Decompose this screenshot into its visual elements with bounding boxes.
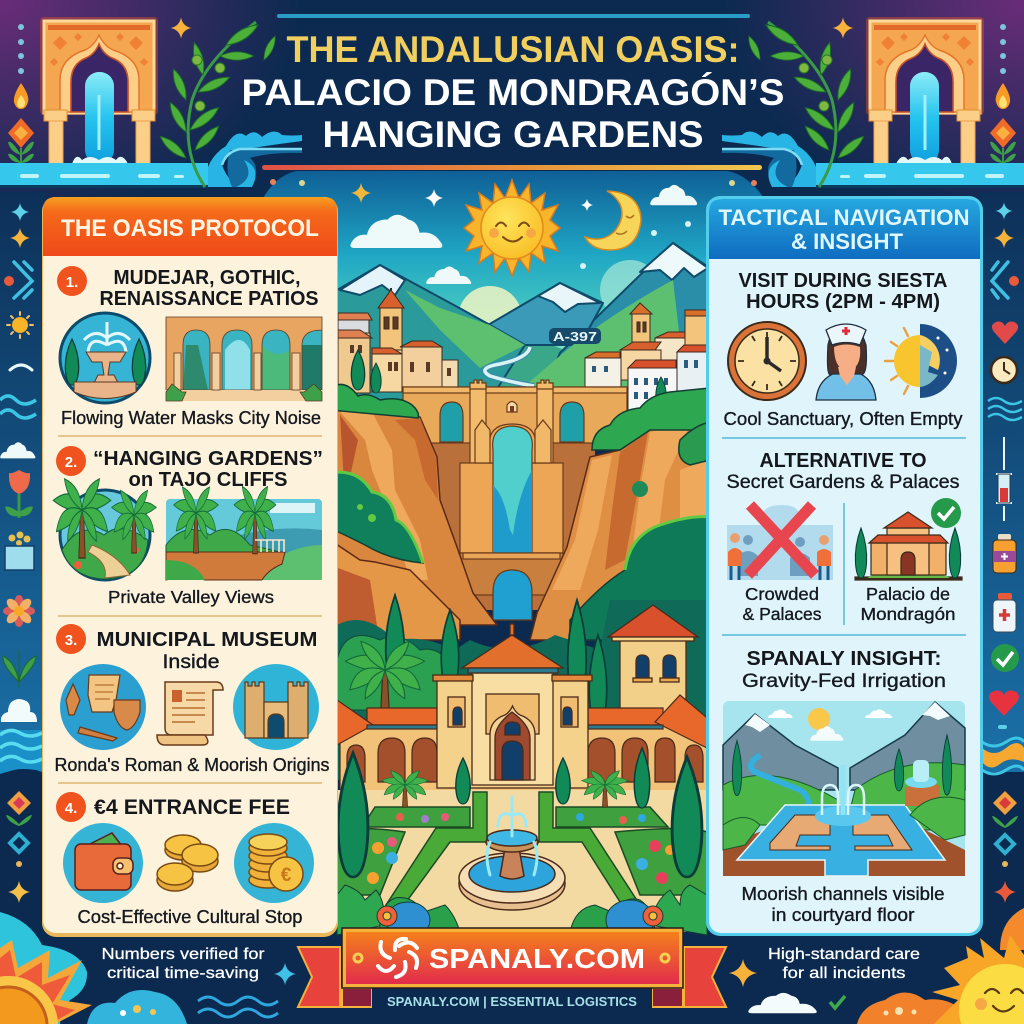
banner: spanaly.com	[298, 928, 726, 1024]
icon: coin stack: €	[281, 865, 292, 886]
caption insight	[742, 884, 944, 925]
step 1 heading: RENAISSANCE PATIOS	[100, 288, 318, 310]
icon: sun and moon	[885, 324, 957, 398]
insight heading	[742, 648, 946, 692]
alternative heading: Secret Gardens & Palaces	[726, 472, 960, 493]
caption 2: Private Valley Views	[108, 587, 274, 607]
insight heading: SPANALY INSIGHT:	[746, 648, 942, 670]
header decoration left: arch, fountain, olive branch	[0, 17, 302, 188]
icon: clock	[728, 322, 806, 400]
left panel heading: THE OASIS PROTOCOL	[61, 215, 319, 242]
fountain	[459, 797, 565, 910]
footer note left	[102, 946, 296, 1017]
right panel heading: TACTICAL NAVIGATION	[718, 205, 970, 230]
palacio caption	[860, 584, 956, 624]
footer note right: High-standard care	[768, 946, 920, 963]
header decoration right: arch, fountain, olive branch	[722, 17, 1024, 188]
icon: artifacts	[60, 664, 146, 750]
right cliff	[530, 420, 710, 640]
moon	[585, 191, 641, 250]
step 1 heading: 1.	[66, 274, 78, 291]
siesta heading: VISIT DURING SIESTA	[738, 270, 948, 292]
right side decorations	[982, 202, 1024, 903]
town left	[338, 288, 458, 393]
icon: coins	[157, 835, 218, 891]
icon: nurse	[816, 324, 876, 400]
footer note right	[729, 946, 920, 1013]
caption 3: Ronda's Roman & Moorish Origins	[54, 755, 330, 775]
icon: wallet	[63, 823, 143, 903]
right panel: tactical navigation and insight	[706, 196, 983, 936]
title: PALACIO DE MONDRAGÓN’S	[242, 71, 784, 113]
palacio caption: Mondragón	[860, 604, 956, 624]
right panel heading: & INSIGHT	[791, 229, 903, 254]
siesta heading: HOURS (2PM - 4PM)	[746, 291, 940, 313]
caption siesta: Cool Sanctuary, Often Empty	[724, 409, 962, 429]
footer note left: Numbers verified for	[102, 946, 265, 963]
footer note left: critical time-saving	[107, 965, 259, 982]
palacio caption: Palacio de	[866, 584, 950, 604]
cypress and palms in garden	[338, 748, 702, 877]
sky	[262, 171, 765, 380]
mountains	[320, 243, 720, 400]
caption 4: Cost-Effective Cultural Stop	[78, 907, 302, 927]
insight heading: Gravity-Fed Irrigation	[742, 671, 946, 692]
step 3 heading	[56, 624, 318, 673]
right panel heading	[709, 199, 980, 259]
icon: castle	[233, 664, 319, 750]
cypress in town	[351, 350, 666, 407]
left cliff	[330, 410, 497, 640]
siesta heading	[738, 270, 948, 313]
road sign A-397: A-397	[553, 329, 597, 344]
step 3 heading: MUNICIPAL MUSEUM	[96, 628, 318, 651]
picture: terrace over valley	[166, 486, 322, 580]
icon: crowded sites crossed out	[727, 505, 833, 580]
step 3 heading: Inside	[162, 652, 220, 673]
caption 1: Flowing Water Masks City Noise	[61, 408, 321, 428]
central scene	[262, 171, 765, 940]
icon: scroll	[157, 682, 223, 745]
step 1 heading: MUDEJAR, GOTHIC,	[114, 267, 300, 289]
crowded caption	[742, 584, 822, 624]
Puente Nuevo bridge	[403, 380, 627, 620]
sun with face	[464, 180, 560, 276]
banner wordmark: SPANALY.COM	[429, 943, 645, 974]
left panel heading	[43, 197, 337, 256]
bottom-left sun corner	[0, 912, 187, 1024]
foreground foliage	[337, 885, 707, 940]
caption insight: in courtyard floor	[772, 905, 915, 925]
palace central facade	[433, 624, 592, 788]
caption insight: Moorish channels visible	[742, 884, 944, 904]
alternative heading: ALTERNATIVE TO	[760, 450, 926, 472]
ribbon tails	[298, 947, 726, 1007]
step 4 heading: 4.	[65, 800, 77, 817]
title: THE ANDALUSIAN OASIS:	[286, 29, 740, 70]
step 2 heading	[56, 446, 323, 491]
sky ornaments	[270, 179, 757, 350]
alternative heading	[726, 450, 960, 493]
picture: arches	[166, 317, 322, 401]
logo swirl	[378, 939, 417, 977]
step 2 heading: “HANGING GARDENS”	[93, 448, 323, 470]
icon: coin stack	[234, 823, 314, 903]
step 2 heading: 2.	[65, 454, 77, 471]
left side decorations	[0, 203, 42, 903]
footer note right: for all incidents	[782, 965, 906, 982]
crowded caption: Crowded	[745, 584, 819, 604]
bottom-right sun corner	[857, 908, 1024, 1024]
crowded caption: & Palaces	[742, 604, 822, 624]
step 2 heading: on TAJO CLIFFS	[128, 469, 288, 491]
banner tagline: SPANALY.COM | ESSENTIAL LOGISTICS	[387, 994, 637, 1009]
title	[242, 14, 784, 170]
left panel: the oasis protocol	[42, 197, 338, 937]
palace galleries	[337, 695, 712, 793]
step 4 heading: €4 ENTRANCE FEE	[94, 796, 290, 819]
picture: irrigation channels	[723, 701, 965, 876]
step 1 heading	[57, 266, 318, 310]
icon: palacio with check	[855, 498, 962, 580]
town right	[585, 303, 710, 414]
icon: fountain	[60, 313, 150, 403]
road	[485, 347, 534, 386]
icon: garden path with palms	[53, 479, 156, 580]
title: HANGING GARDENS	[322, 114, 704, 155]
garden backdrop with trees	[337, 595, 707, 780]
step 4 heading	[56, 792, 290, 822]
road sign A-397	[549, 328, 601, 344]
step 3 heading: 3.	[65, 632, 77, 649]
palace tower	[608, 605, 698, 720]
courtyard and hedges	[337, 790, 707, 932]
cliff bushes	[330, 384, 710, 640]
